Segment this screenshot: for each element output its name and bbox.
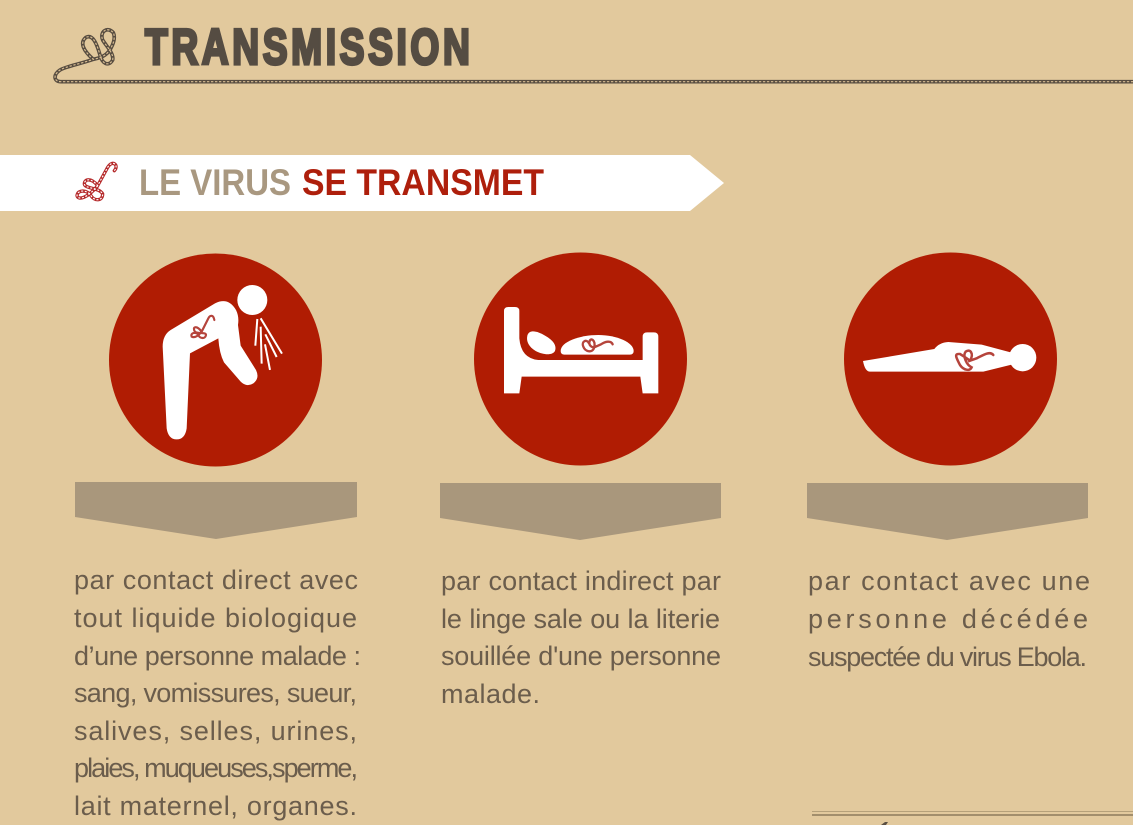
text block: tout liquide biologique [74,603,357,633]
panel: direct contact [74,254,361,821]
banner: le virus se transmet [0,155,724,211]
text block: le linge sale ou la literie [441,604,720,634]
text block: lait maternel, organes. [74,791,357,821]
arrow banner [75,482,357,539]
icon: lying body [844,252,1057,466]
text block [74,565,361,821]
text block: malade. [441,679,540,709]
text block: plaies, muqueuses,sperme, [74,753,358,783]
text block [808,566,1090,672]
title: TRANSMISSION [145,20,473,75]
arrow banner [440,483,721,540]
text block: souillée d'une personne [441,641,721,671]
icon: bed [474,252,687,466]
icon: person vomiting [109,254,322,466]
panel: deceased contact [807,252,1090,672]
banner heading: LE VIRUS [139,162,291,203]
text block: par contact direct avec [74,565,358,595]
text block [441,566,721,709]
banner heading: SE TRANSMET [302,162,544,203]
panel: indirect contact [440,252,721,709]
text block: par contact avec une [808,566,1090,596]
arrow banner [807,483,1088,540]
text block: suspectée du virus Ebola. [808,642,1087,672]
banner shape [0,155,724,211]
text block: d’une personne malade : [74,641,361,671]
icon: red rope [77,163,116,200]
text block: par contact indirect par [441,566,721,596]
text block: personne décédée [808,604,1088,634]
text block: sang, vomissures, sueur, [74,678,357,708]
header: rope icon and rule [55,30,1133,82]
text block: salives, selles, urines, [74,716,357,746]
